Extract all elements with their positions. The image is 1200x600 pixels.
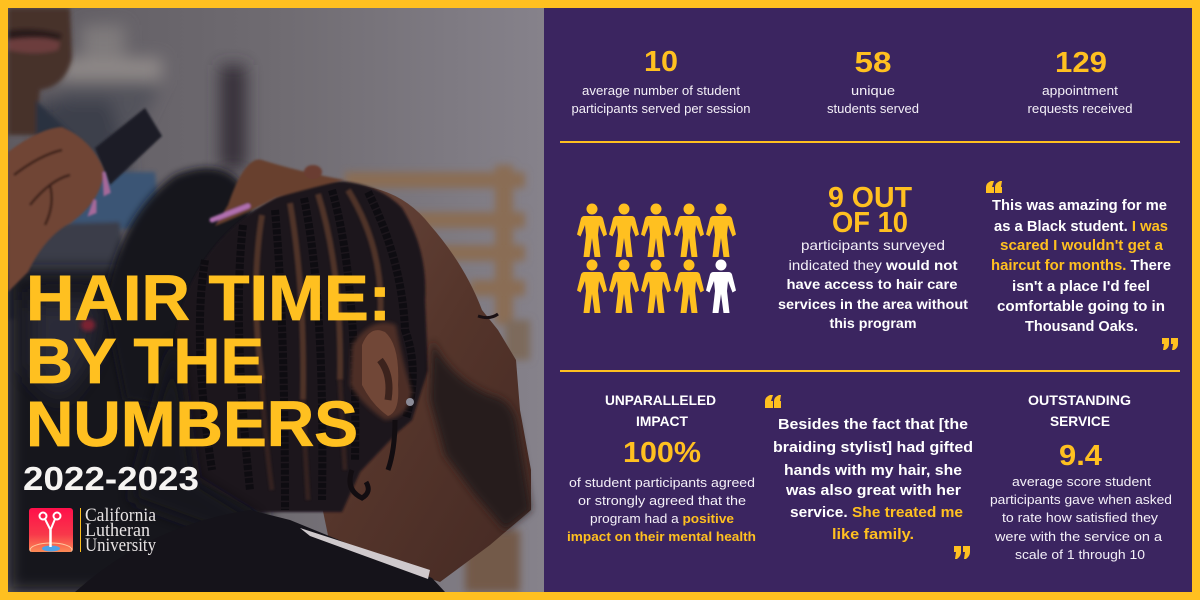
stat: 129 appointment requests: requests received <box>1028 101 1132 116</box>
stat: 10 average participants: average number of student <box>582 83 740 98</box>
dark lower left background <box>8 270 270 592</box>
icon: opening quote mark <box>986 181 1002 193</box>
ear <box>362 330 398 416</box>
braids <box>200 190 413 510</box>
stat: 10 average participants <box>572 46 750 116</box>
quote: Black student <box>991 198 1171 335</box>
stat: unparalleled impact 100%: IMPACT <box>636 413 688 429</box>
subtitle: year: 2022-2023 <box>23 460 199 497</box>
logo: California Lutheran University: University <box>85 535 156 556</box>
stat: 9 out of 10: services in the area without <box>778 296 968 312</box>
stat: 10 average participants: 10 <box>644 46 678 78</box>
quote: Black student: comfortable going to in <box>997 299 1165 315</box>
stat: 9 out of 10: OF 10 <box>832 207 908 239</box>
quote: braiding stylist: braiding stylist] had gifted <box>773 440 973 456</box>
quote: braiding stylist: was also great with her <box>785 483 961 499</box>
panel: purple statistics background <box>544 8 1192 592</box>
stat: 9 out of 10: this program <box>830 315 916 331</box>
stat: 129 appointment requests: 129 <box>1055 47 1107 79</box>
afro hair <box>108 162 255 329</box>
quote: braiding stylist: like family. <box>832 527 914 543</box>
quote: Black student: Thousand Oaks. <box>1025 319 1138 335</box>
braided hair mass <box>175 181 428 512</box>
stat: unparalleled impact 100%: of student participants agreed <box>569 475 755 490</box>
stat: unparalleled impact 100%: 100% <box>623 437 701 469</box>
logo: California Lutheran University <box>29 505 157 557</box>
title: NUMBERS <box>26 388 358 460</box>
stat: outstanding service 9.4: participants gave when asked <box>990 492 1172 507</box>
stat: outstanding service 9.4: 9.4 <box>1059 440 1102 472</box>
stat: unparalleled impact 100%: UNPARALLELED <box>605 392 716 408</box>
quote: braiding stylist <box>773 417 973 543</box>
stat: outstanding service 9.4: to rate how satisfied they <box>1002 510 1159 525</box>
stat: 9 out of 10 <box>778 182 968 331</box>
stat: 10 average participants: participants served per session <box>572 101 750 116</box>
stat: 9 out of 10: participants surveyed <box>801 237 945 253</box>
cape and collar <box>75 510 445 592</box>
quote: Black student: isn't a place I'd feel <box>1012 279 1150 295</box>
icon: closing quote mark <box>1162 338 1178 350</box>
stat: unparalleled impact 100% <box>567 392 756 544</box>
quote: braiding stylist: service. She treated me <box>790 505 963 521</box>
stat: 9 out of 10: indicated they would not <box>788 257 958 273</box>
stat: 129 appointment requests <box>1028 47 1132 116</box>
quote: Black student: haircut for months. There <box>991 258 1171 274</box>
stat: outstanding service 9.4: average score student <box>1012 474 1151 489</box>
stylist hand <box>8 127 109 292</box>
icon: scissors <box>29 508 73 552</box>
hair below the head, blending to dark <box>200 475 204 480</box>
stylist face and neck <box>8 8 72 135</box>
icon: nine of ten people pictogram <box>577 204 736 313</box>
title: HAIR TIME: <box>26 262 391 334</box>
stat: 58 unique students: students served <box>827 101 919 116</box>
quote: Black student: scared I wouldn't get a <box>1000 238 1164 254</box>
quote: Black student: as a Black student. I was <box>994 219 1168 235</box>
stat: outstanding service 9.4: scale of 1 through 10 <box>1015 547 1145 562</box>
stat: unparalleled impact 100%: impact on their mental health <box>567 529 756 544</box>
icon: closing quote mark <box>954 546 970 559</box>
title: BY THE <box>26 325 264 397</box>
face and neck <box>323 186 531 582</box>
title <box>26 262 391 460</box>
beard <box>430 340 531 530</box>
skin around the ear <box>350 322 412 420</box>
stat: unparalleled impact 100%: program had a positive <box>590 511 734 526</box>
braid ends at neck <box>350 420 395 498</box>
stat: 58 unique students <box>827 47 919 116</box>
logo: California Lutheran University: California <box>85 505 157 526</box>
stat: 9 out of 10: 9 OUT <box>828 182 912 214</box>
partings between braids <box>256 190 381 400</box>
stat: outstanding service 9.4: SERVICE <box>1050 413 1110 429</box>
stat: 9 out of 10: have access to hair care <box>786 276 958 292</box>
stat: unparalleled impact 100%: or strongly agreed that the <box>578 493 746 508</box>
quote: Black student: This was amazing for me <box>992 198 1167 214</box>
logo: California Lutheran University: Lutheran <box>85 520 150 541</box>
stat: outstanding service 9.4: OUTSTANDING <box>1028 392 1131 408</box>
stylist hand on head <box>212 160 345 226</box>
quote: braiding stylist: hands with my hair, she <box>784 463 962 479</box>
panel: photo of hair braiding <box>8 8 544 592</box>
stat: 129 appointment requests: appointment <box>1042 83 1118 98</box>
icon: opening quote mark <box>765 395 781 408</box>
comb <box>95 108 162 185</box>
stat: 58 unique students: unique <box>851 83 895 98</box>
stat: outstanding service 9.4: were with the service on a <box>994 529 1163 544</box>
quote: braiding stylist: Besides the fact that [the <box>778 417 968 433</box>
stat: 58 unique students: 58 <box>854 47 892 79</box>
stat: outstanding service 9.4 <box>990 392 1172 562</box>
